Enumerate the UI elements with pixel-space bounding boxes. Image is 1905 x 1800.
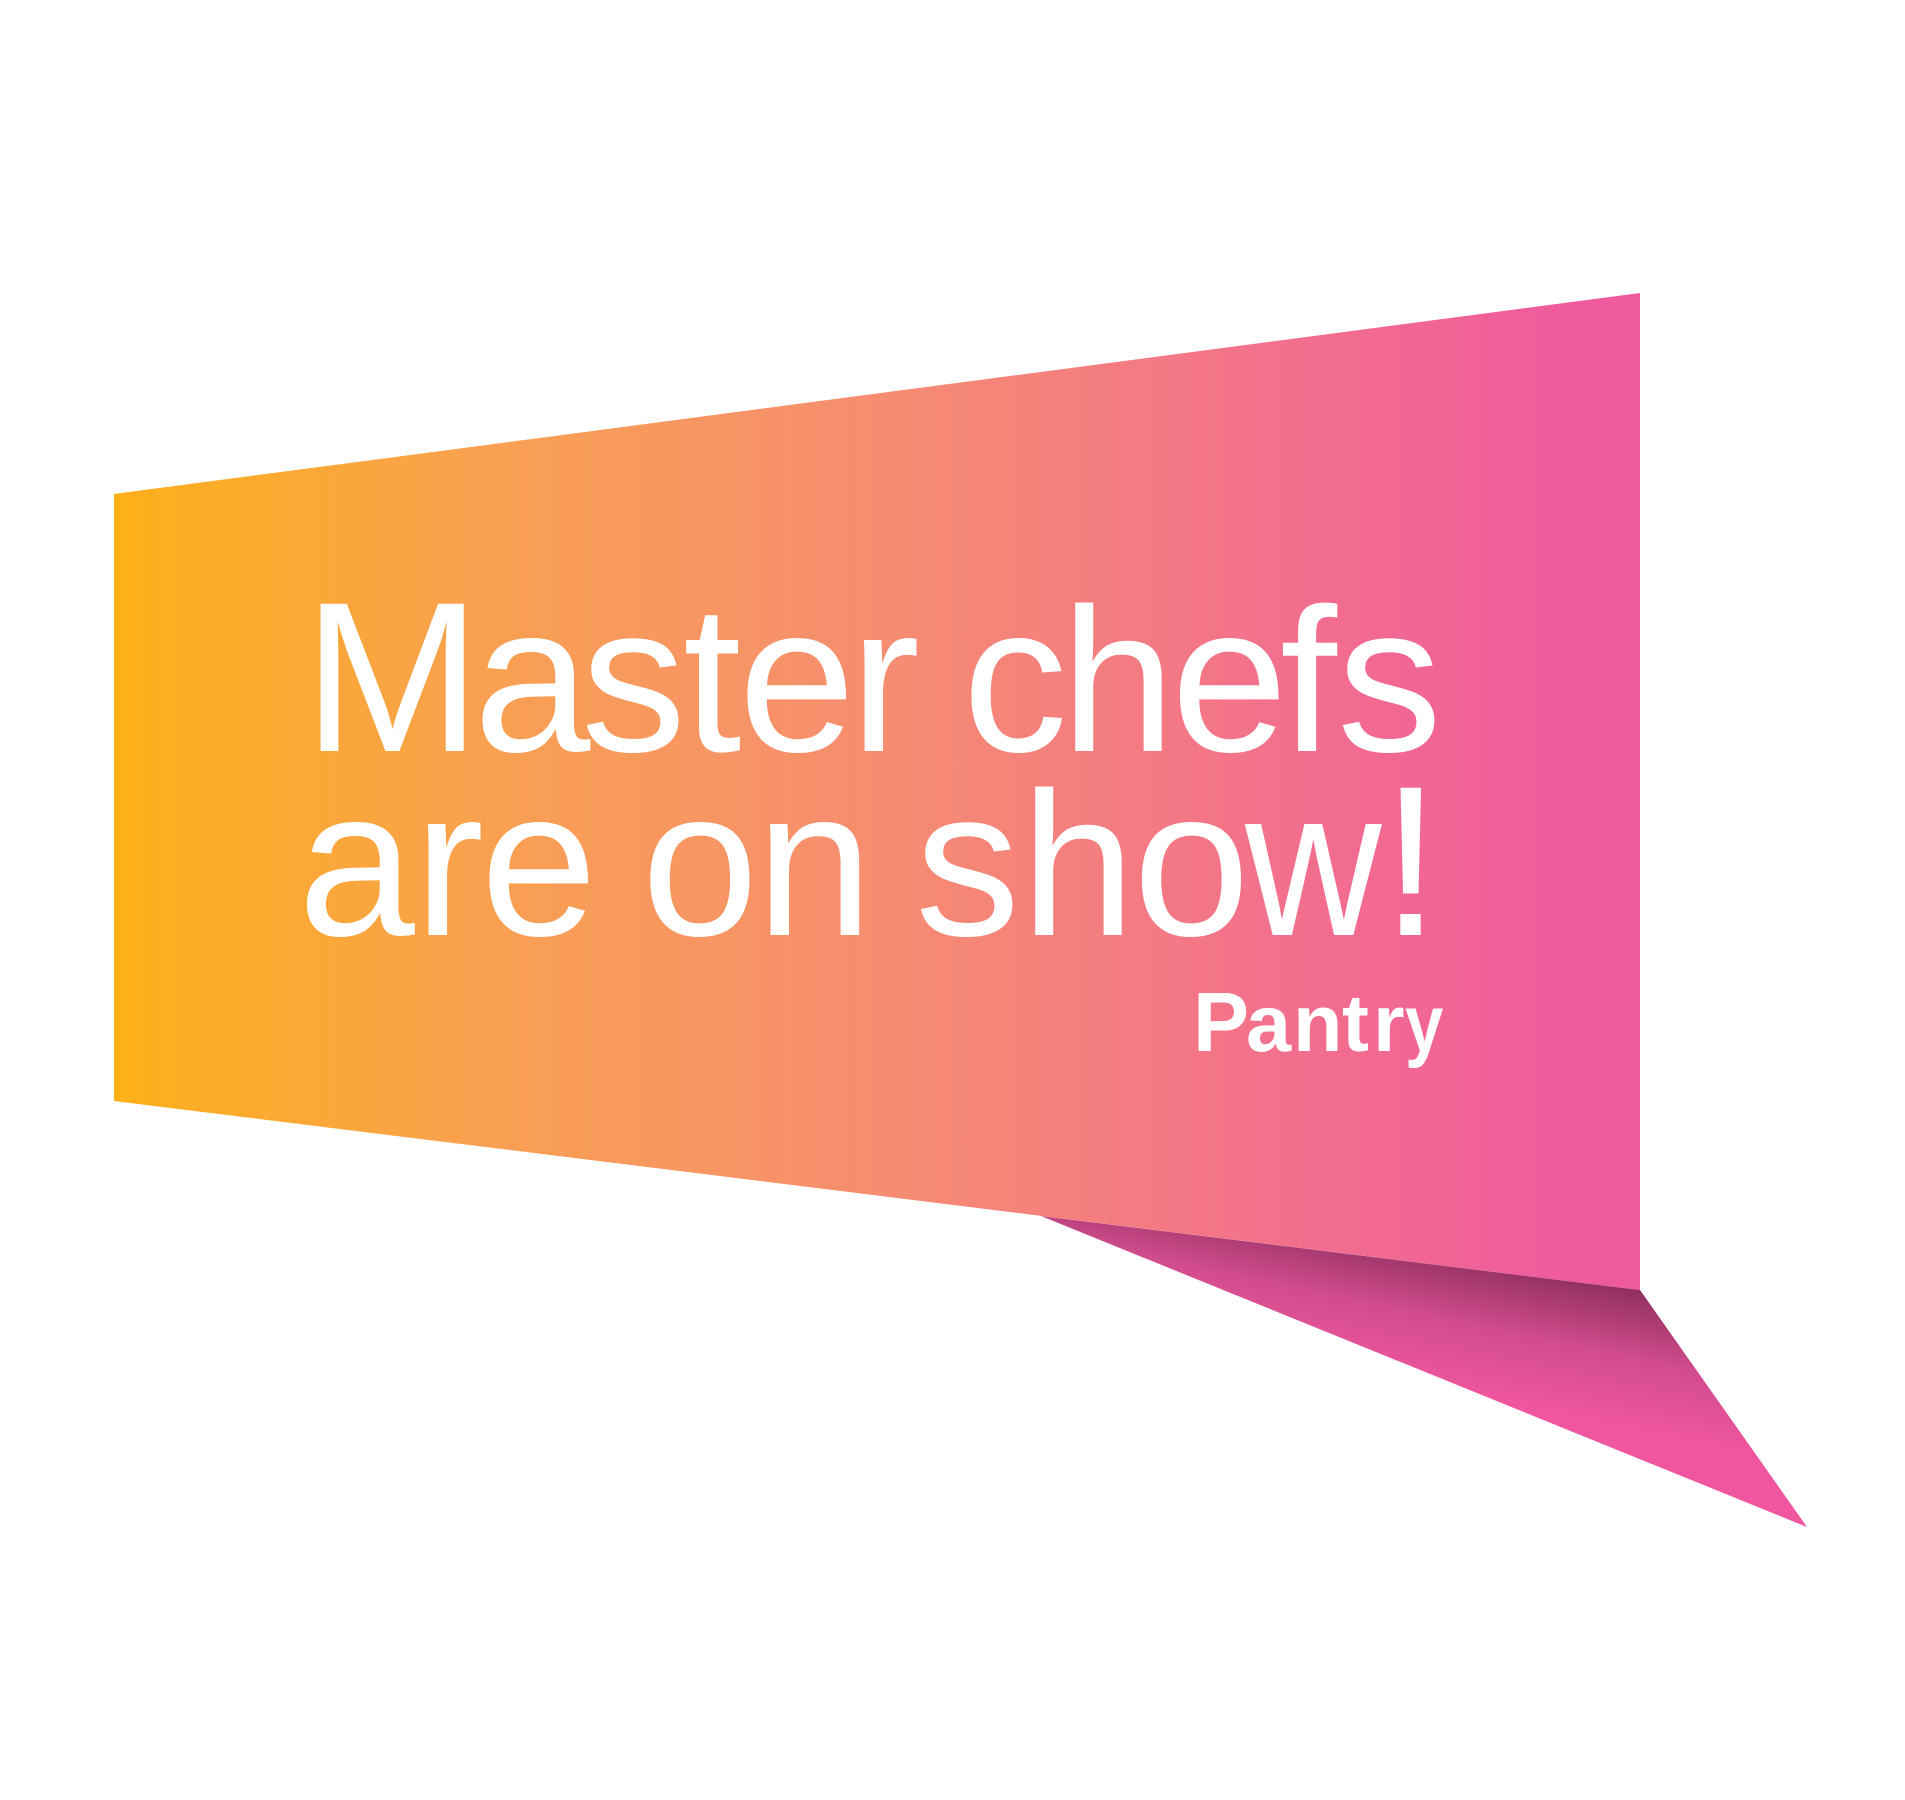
- headline line 1: Masterchefs: [303, 558, 1442, 797]
- headline line 2: !: [1381, 742, 1440, 981]
- headline: [298, 558, 1442, 981]
- Pantry logo wordmark: Pantr: [1193, 975, 1405, 1069]
- speech bubble tail: [1041, 1216, 1807, 1527]
- headline line 2: w: [1244, 746, 1382, 980]
- gradient banner panel: [114, 293, 1640, 1290]
- Pantry logo wordmark: y: [1405, 978, 1443, 1068]
- headline line 2: areonsho: [298, 745, 1250, 980]
